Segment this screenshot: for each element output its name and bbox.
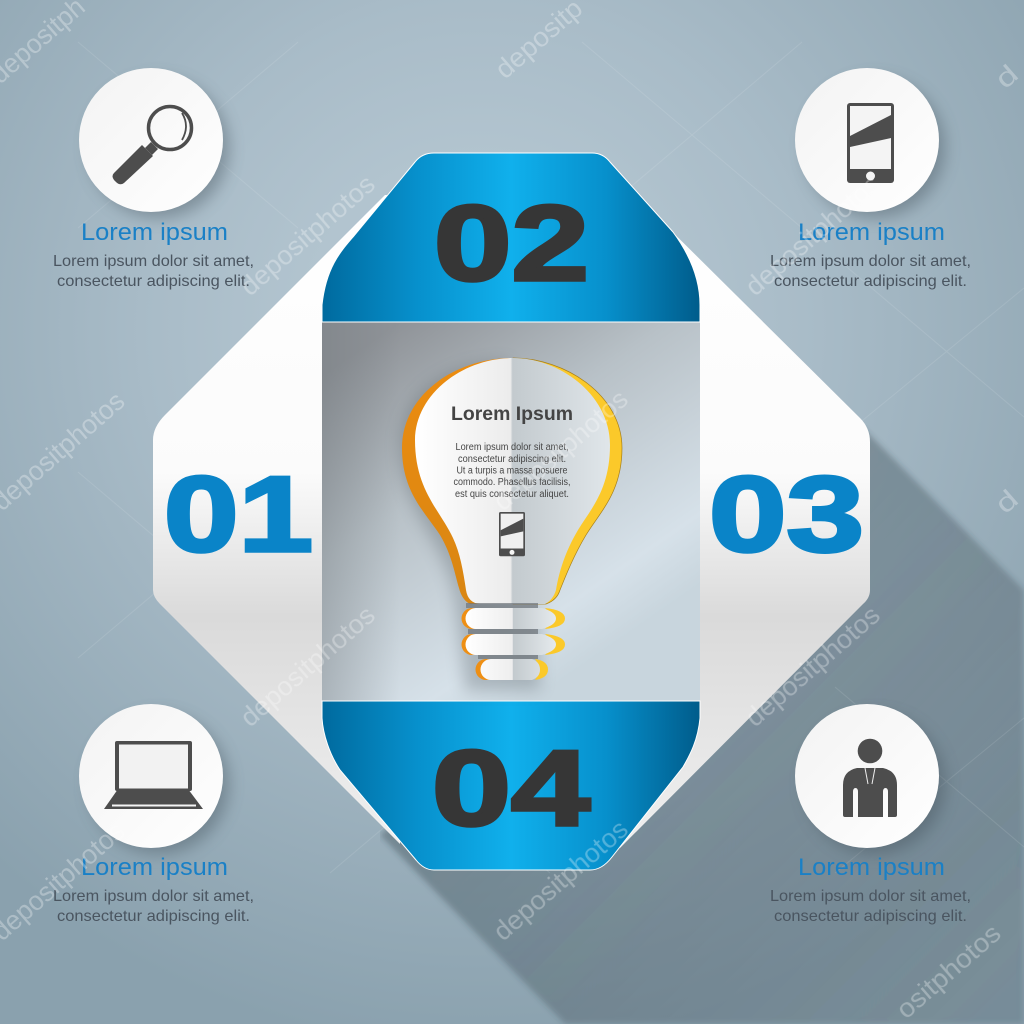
circle [79, 704, 223, 848]
icon: laptop [104, 741, 203, 809]
circle [79, 68, 223, 212]
bulb shadow [400, 362, 540, 690]
panel: bottom blue tab [322, 701, 700, 870]
number 01: 01 [164, 454, 313, 574]
heading: Lorem ipsum [798, 219, 945, 246]
circle [795, 704, 939, 848]
text block: Lorem ipsum dolor sit amet, [53, 253, 254, 270]
number 03: 03 [709, 454, 864, 574]
bulb body text: Ut a turpis a massa posuere [456, 466, 568, 476]
watermarks: ositphotos [890, 918, 1007, 1024]
panel: mobile [770, 68, 971, 290]
number 04: 04 [432, 728, 590, 848]
watermarks: d [989, 484, 1024, 520]
panel: laptop [53, 704, 254, 925]
watermarks: depositphotos [234, 169, 381, 302]
panel: search [53, 68, 254, 290]
text block: consectetur adipiscing elit. [774, 908, 967, 925]
bulb body text: consectetur adipiscing elit. [458, 454, 566, 465]
bulb neck shadow [466, 603, 538, 608]
circle [795, 68, 939, 212]
text block: consectetur adipiscing elit. [57, 273, 250, 290]
icon: businessman [843, 739, 897, 817]
text block: Lorem ipsum dolor sit amet, [53, 888, 254, 905]
text block [53, 888, 254, 925]
icon: magnifier [112, 106, 192, 184]
rung 1 [462, 608, 565, 629]
watermarks: depositphotos [234, 600, 381, 733]
text block [770, 888, 971, 925]
icon: small phone [499, 512, 525, 556]
watermarks: depositphotos [487, 384, 634, 517]
number 02: 02 [434, 183, 589, 303]
panel: person [770, 704, 971, 925]
rung shadow [468, 629, 538, 634]
watermarks: d [989, 59, 1024, 95]
bulb title: Lorem Ipsum [451, 404, 573, 425]
icon: phone [847, 103, 894, 183]
text block [770, 253, 971, 290]
bulb body text: commodo. Phasellus facilisis, [454, 477, 570, 488]
text block: Lorem ipsum dolor sit amet, [770, 888, 971, 905]
panel: top blue tab [322, 153, 700, 322]
heading: Lorem ipsum [81, 219, 228, 246]
text block: consectetur adipiscing elit. [774, 273, 967, 290]
heading: Lorem ipsum [81, 854, 228, 881]
watermarks: depositphotos [487, 814, 634, 947]
panel: right white fold [620, 180, 870, 848]
bulb body text: Lorem ipsum dolor sit amet, [456, 442, 568, 453]
watermarks: depositphotos [739, 169, 886, 302]
circle shadows [89, 78, 945, 854]
rung 3 [476, 659, 548, 680]
bulb body text [454, 442, 570, 500]
text block: consectetur adipiscing elit. [57, 908, 250, 925]
bulb yellow back [513, 358, 622, 604]
panel: centre [322, 322, 700, 701]
watermarks: depositphotos [739, 600, 886, 733]
bulb orange back [402, 358, 513, 604]
rung 2 [462, 634, 565, 655]
rung shadow [478, 655, 538, 659]
light bulb [400, 358, 622, 690]
panel: left white fold [153, 195, 400, 844]
long shadow of the octagon [380, 425, 1024, 1024]
bulb face [415, 358, 610, 604]
text block [53, 253, 254, 290]
text block: Lorem ipsum dolor sit amet, [770, 253, 971, 270]
heading: Lorem ipsum [798, 854, 945, 881]
bulb body text: est quis consectetur aliquet. [455, 489, 569, 500]
